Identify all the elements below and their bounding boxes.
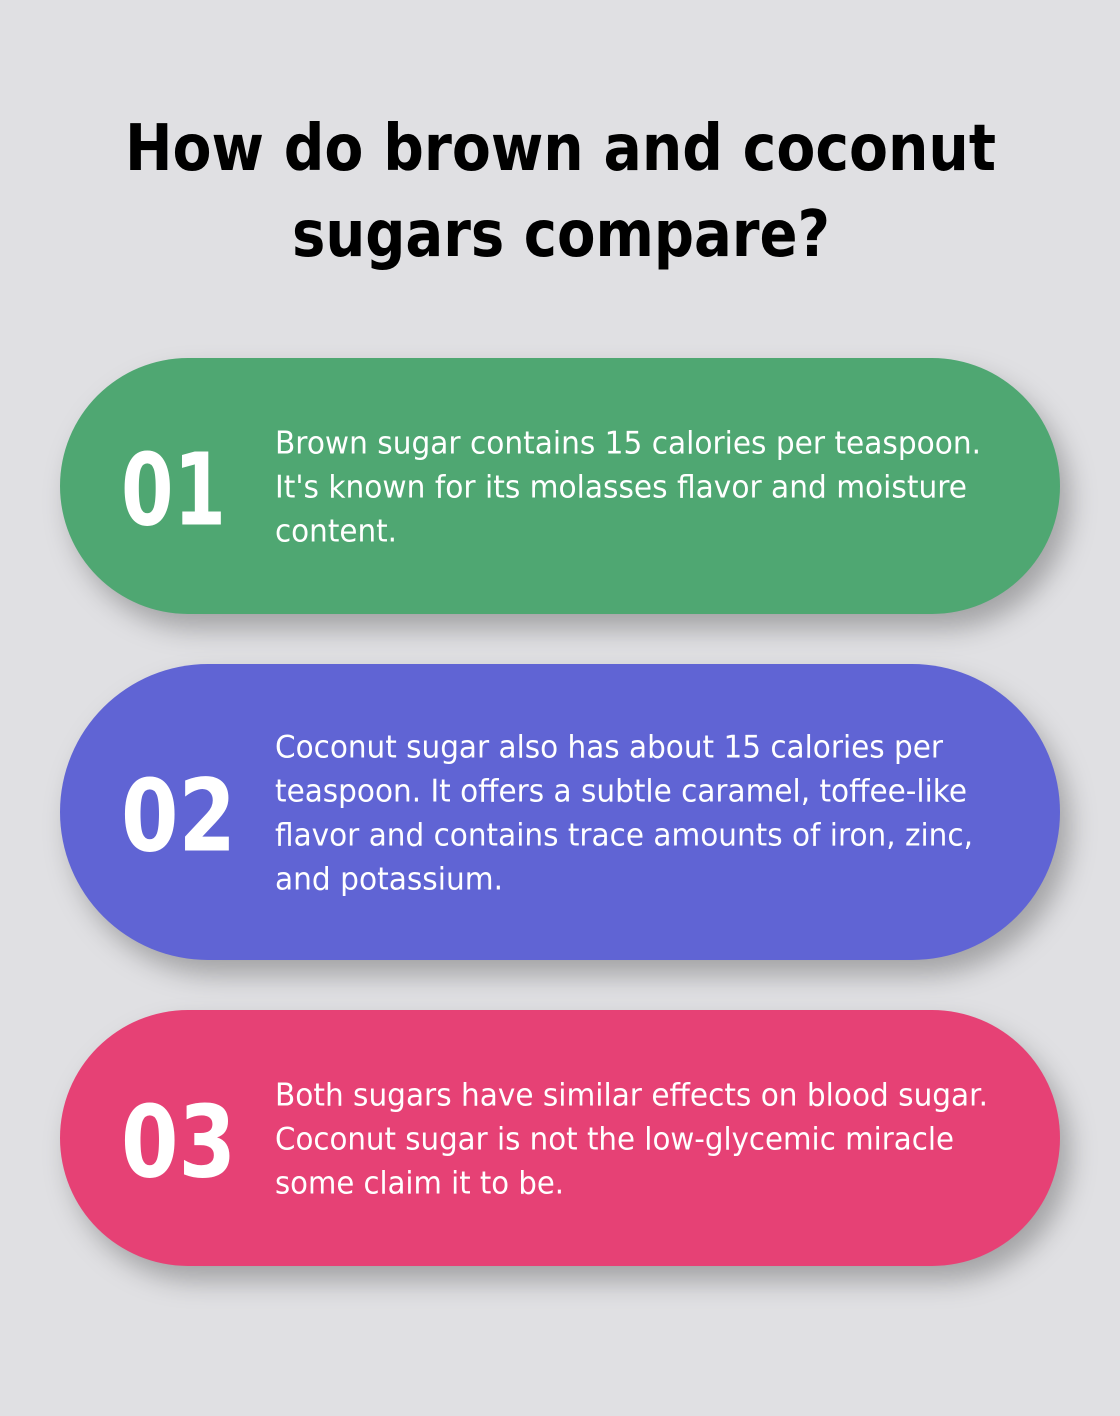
brown sugar text: content.: [275, 514, 397, 550]
coconut sugar text: flavor and contains trace amounts of iron, zinc,: [275, 818, 973, 854]
green pill background: [60, 358, 1060, 614]
coconut sugar text: Coconut sugar also has about 15 calories per: [275, 730, 943, 766]
coconut sugar text: teaspoon. It offers a subtle caramel, toffee-like: [275, 774, 967, 810]
title: sugars compare?: [292, 198, 830, 272]
blood sugar text: [275, 1078, 988, 1202]
title: [125, 112, 996, 272]
pink pill background: [60, 1010, 1060, 1266]
title: How do brown and coconut: [125, 112, 996, 186]
number 03: 03: [121, 1084, 236, 1200]
coconut sugar text: and potassium.: [275, 862, 503, 898]
brown sugar text: It's known for its molasses flavor and moisture: [275, 470, 967, 506]
panel: coconut sugar card: [60, 664, 1060, 960]
blue pill background: [60, 664, 1060, 960]
blood sugar text: some claim it to be.: [275, 1166, 564, 1202]
blood sugar text: Both sugars have similar effects on blood sugar.: [275, 1078, 988, 1114]
brown sugar text: [275, 426, 981, 550]
brown sugar text: Brown sugar contains 15 calories per teaspoon.: [275, 426, 981, 462]
coconut sugar text: [275, 730, 973, 898]
blood sugar text: Coconut sugar is not the low-glycemic miracle: [275, 1122, 954, 1158]
panel: blood sugar card: [60, 1010, 1060, 1266]
number 02: 02: [121, 758, 236, 874]
number 01: 01: [121, 432, 226, 548]
panel: brown sugar card: [60, 358, 1060, 614]
